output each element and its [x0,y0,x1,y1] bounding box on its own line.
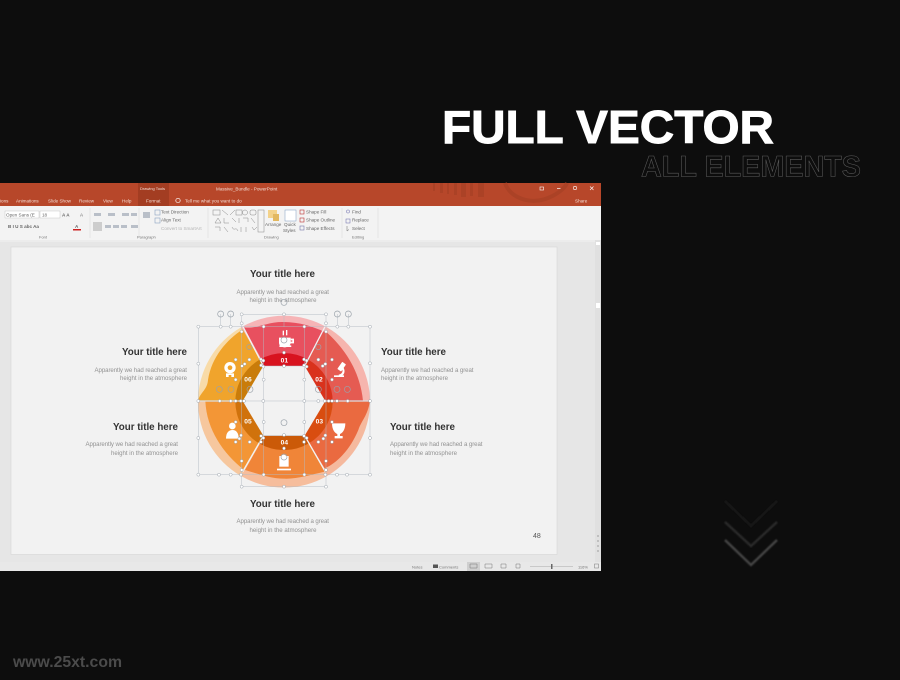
text block: lower right [390,422,483,457]
segment numbers: 05 [244,418,252,425]
ribbon: Convert to SmartArt [161,226,202,231]
text block: lower right: Apparently we had reached a great [390,441,483,448]
inner ring [235,353,333,450]
text block: bottom [236,499,329,534]
ribbon: Editing [352,234,364,240]
text block: lower left: Your title here [113,422,179,433]
title bar: Tell me what you want to do [185,198,242,204]
text block: upper left: height in the atmosphere [120,375,188,382]
title bar: Review [79,198,95,204]
ribbon: B I U S abc Aa [8,224,39,229]
ribbon: Open Sans (E [6,212,35,218]
text block: lower right: Your title here [390,422,456,433]
ribbon: Replace [352,218,369,222]
segment 01 [244,322,325,401]
text block: upper right: Your title here [381,347,447,358]
icon: microscope [334,362,346,377]
text block: top: height in the atmosphere [250,297,317,304]
text block: upper left: Apparently we had reached a great [94,367,187,374]
segment 04 [245,401,325,479]
ribbon: A [75,224,79,229]
headline: full vector: FULL VECTOR [442,101,774,153]
ribbon: A A [62,212,70,218]
segment numbers: 01 [281,358,288,365]
ribbon: Drawing [264,234,279,240]
icon: head and lines [277,455,291,470]
title bar [0,183,601,206]
text block: lower left: height in the atmosphere [111,450,179,457]
title bar: Animations [16,198,39,204]
title bar: Help [122,198,132,204]
ribbon: Font [39,234,48,240]
icon: person [226,423,239,439]
text block: bottom: height in the atmosphere [250,527,317,534]
page number: 48 [533,533,541,540]
outer light ring [198,316,370,488]
text block: upper right [381,347,474,382]
ribbon: Shape Effects [306,226,335,231]
segment 06 [198,329,284,401]
text block: top [236,269,329,304]
shape gallery [213,210,264,232]
title bar: Slide Show [48,198,72,204]
title bar: Share [575,198,588,204]
segment 03 [284,401,370,468]
ribbon: Shape Outline [306,218,336,222]
ribbon: Styles [283,228,296,233]
selection frames [198,314,370,487]
icon: chevron arrows [725,501,777,565]
powerpoint window [0,183,601,571]
ribbon: Shape Fill [306,210,326,214]
ribbon: Select [352,226,365,231]
segment numbers: 02 [315,377,323,384]
watermark: www.25xt.com [12,654,122,671]
ribbon: Quick [284,222,296,227]
text block: upper left [94,347,188,382]
icon: coffee cup [279,330,294,347]
text block: top: Your title here [250,269,316,280]
ribbon: Paragraph [137,234,156,240]
status bar: 116% [578,564,588,570]
title bar: View [103,198,114,204]
scrollbar [595,240,601,562]
rotation handles [216,299,351,460]
title bar: ions [0,198,9,204]
segment numbers: 04 [281,439,288,446]
ribbon: A [80,212,84,218]
subheading: all elements outline: ALL ELEMENTS [641,150,861,184]
title bar: Format [146,198,161,204]
icon: trophy [332,423,345,438]
ribbon: Align Text [161,218,182,222]
text block: bottom: Your title here [250,499,316,510]
text block: upper right: Apparently we had reached a great [381,367,474,374]
text block: lower left [86,422,179,457]
segment 05 [205,401,284,469]
segment numbers: 03 [316,419,323,426]
ribbon: Find [352,210,361,214]
status bar: Comments [439,564,458,570]
text block: bottom: Apparently we had reached a great [236,518,329,525]
status bar: Notes [412,564,422,570]
slide panel [11,247,557,554]
segment numbers: 06 [244,377,252,384]
status bar [0,562,601,571]
segment 02 [284,331,363,401]
text block: upper right: height in the atmosphere [381,375,449,382]
dividers [197,326,371,472]
donut chart [197,299,371,488]
ribbon: Text Direction [161,210,189,214]
title bar: Drawing Tools [140,186,165,191]
center hexagon [243,366,325,436]
ribbon: Arrange [265,222,282,227]
text block: top: Apparently we had reached a great [236,289,329,296]
ribbon [0,206,601,242]
title bar: Massive_Bundle - PowerPoint [216,186,278,192]
icon: webcam [224,362,236,377]
ribbon: 18 [42,212,48,218]
text block: lower left: Apparently we had reached a great [86,441,178,448]
text block: upper left: Your title here [122,347,188,358]
segment numbers [244,358,323,446]
resize handles [197,313,371,488]
text block: lower right: height in the atmosphere [390,450,458,457]
